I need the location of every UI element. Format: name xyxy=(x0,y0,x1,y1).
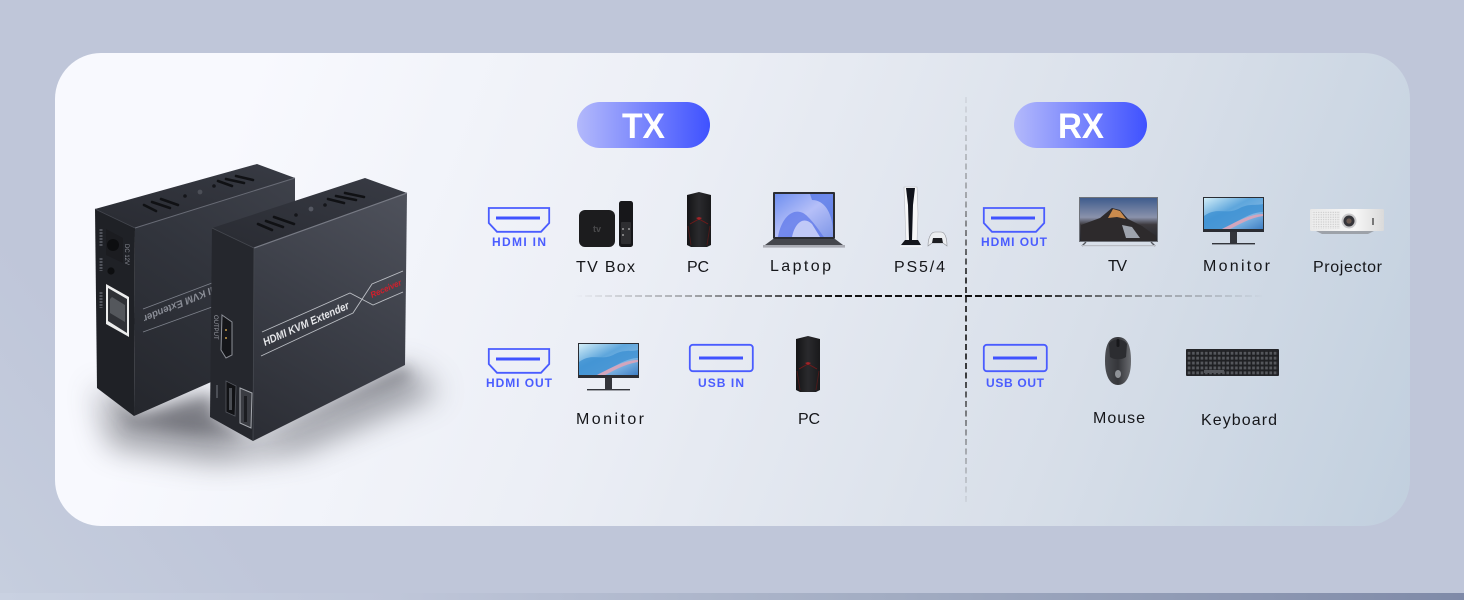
device: TV box: tv xyxy=(593,224,601,234)
label: Keyboard: Keyboard xyxy=(1201,412,1277,429)
port: USB IN xyxy=(690,345,753,390)
label: Monitor (RX): Monitor xyxy=(1203,258,1271,275)
label: PC: PC xyxy=(687,259,709,276)
device: TV xyxy=(1079,197,1158,246)
port: HDMI OUT (TX): HDMI OUT xyxy=(486,376,553,390)
power jack xyxy=(106,229,123,263)
upside-down product label: HDMI KVM Extender xyxy=(140,276,233,324)
label: TV: TV xyxy=(1108,258,1127,275)
receiver box (front) xyxy=(210,178,407,441)
label: TV Box: TV Box xyxy=(576,259,635,276)
label: PC (USB): PC xyxy=(798,411,820,428)
device: monitor (RX) xyxy=(1203,197,1264,244)
device: monitor (TX) xyxy=(578,343,639,390)
port: HDMI OUT (RX): HDMI OUT xyxy=(981,235,1048,249)
HDMI port xyxy=(221,315,232,358)
device: laptop xyxy=(763,192,845,248)
TX pill heading xyxy=(577,102,710,148)
device: PC tower xyxy=(687,192,711,247)
port: USB IN: USB IN xyxy=(698,376,744,390)
label: Projector: Projector xyxy=(1313,259,1383,276)
panel: rounded card xyxy=(55,53,1410,526)
device: mouse xyxy=(1105,337,1131,385)
TX pill heading: TX xyxy=(622,107,666,146)
device: PS5 console and controller xyxy=(900,187,947,246)
port: HDMI OUT (TX) xyxy=(486,349,553,390)
transmitter box (rear): DC 12V xyxy=(123,244,129,265)
label: PS5/4: PS5/4 xyxy=(894,259,945,276)
dashed divider: horizontal xyxy=(575,295,1265,297)
device: keyboard xyxy=(1186,349,1279,376)
top vents xyxy=(144,176,253,211)
port: USB OUT xyxy=(984,345,1047,390)
port: HDMI OUT (RX) xyxy=(981,208,1048,249)
label graphic lines xyxy=(261,271,403,356)
port: HDMI IN: HDMI IN xyxy=(492,235,546,249)
device: projector xyxy=(1310,209,1384,234)
label: Laptop: Laptop xyxy=(770,258,831,275)
port: USB OUT: USB OUT xyxy=(986,376,1045,390)
product name: HDMI KVM Extender xyxy=(261,300,352,349)
floor shadow xyxy=(95,366,440,462)
USB ports xyxy=(226,381,236,416)
receiver box (front): OUTPUT xyxy=(212,315,218,340)
device: TV box xyxy=(579,201,633,247)
label: Monitor (TX): Monitor xyxy=(576,411,645,428)
label: Mouse: Mouse xyxy=(1093,410,1145,427)
upside-down product label xyxy=(142,282,212,332)
RX pill heading xyxy=(1014,102,1147,148)
product photo: HDMI KVM extender pair xyxy=(95,164,440,462)
device: PC tower (USB) xyxy=(796,336,820,392)
receiver tag: Receiver xyxy=(369,277,404,300)
transmitter box (rear) xyxy=(95,164,295,416)
RX pill heading: RX xyxy=(1058,107,1105,146)
bottom gradient strip xyxy=(0,593,1464,600)
port: HDMI IN xyxy=(489,208,549,249)
RJ45 port xyxy=(106,284,129,337)
top vents xyxy=(258,193,364,230)
dashed divider: vertical xyxy=(965,97,967,505)
